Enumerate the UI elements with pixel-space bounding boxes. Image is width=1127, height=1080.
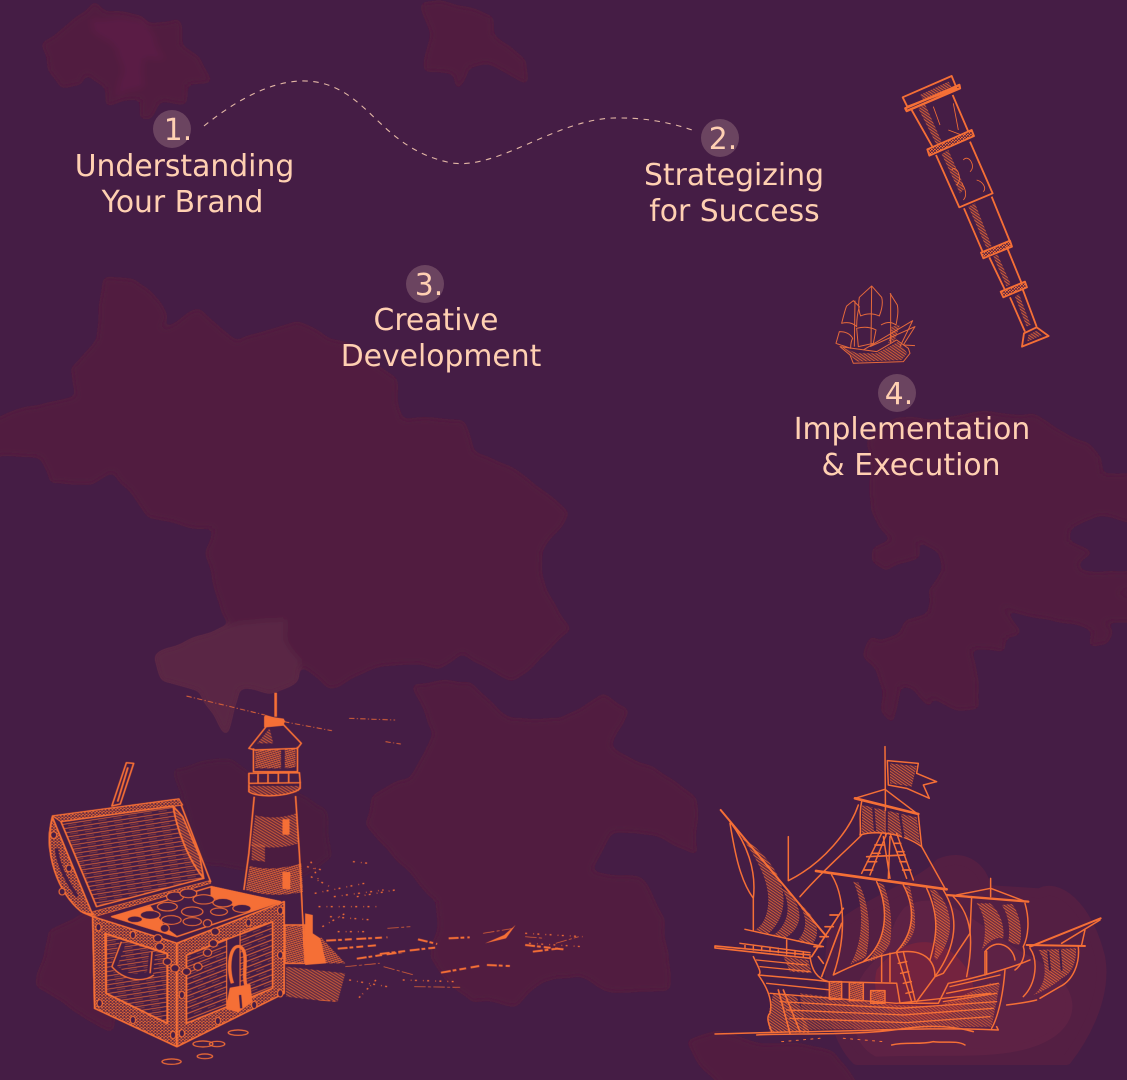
icon: spyglass <box>903 76 1049 347</box>
chest right face <box>177 902 284 1047</box>
mast bases <box>882 952 987 1002</box>
loose coins <box>162 1030 248 1064</box>
blob: top middle <box>423 0 527 90</box>
lateen cloth <box>730 822 823 947</box>
blob: top left <box>41 2 211 118</box>
necklace beads <box>154 920 219 975</box>
badge 1 <box>153 110 191 148</box>
blob: right <box>865 412 1127 725</box>
coins <box>127 889 251 926</box>
step 4 <box>794 374 1030 483</box>
cannon ports <box>829 982 885 1003</box>
roof <box>249 723 301 750</box>
icon: small ship <box>836 286 915 363</box>
blob: bottom left of ship <box>688 1032 860 1080</box>
main sail <box>832 875 972 1002</box>
spyglass: ring 2 <box>981 241 1012 258</box>
label 4: Implementation <box>794 412 1030 447</box>
main yard <box>816 871 947 889</box>
rigging <box>788 805 945 897</box>
main sail outline <box>832 875 954 1002</box>
tower walls <box>244 796 305 963</box>
route: dashed connector 1 to 2 <box>204 81 692 164</box>
rear stays and yard <box>957 878 1023 901</box>
ladders <box>862 833 913 880</box>
label 1: Understanding <box>75 149 294 184</box>
spyglass: ring 1 <box>927 130 974 156</box>
light beams <box>186 696 401 744</box>
hull hatch <box>768 993 810 1033</box>
right panel <box>186 922 273 1023</box>
gallery <box>249 773 300 783</box>
lid handle <box>112 763 134 806</box>
coin pile <box>167 892 183 901</box>
padlock <box>227 985 252 1012</box>
top sail <box>855 789 922 847</box>
label 1: Your Brand <box>101 185 263 220</box>
label 2: Strategizing <box>644 158 824 193</box>
gallery base <box>249 782 300 796</box>
tower base <box>285 925 305 963</box>
badge 2 <box>701 119 739 157</box>
step 2 <box>644 119 824 229</box>
small ship: masts and foresail <box>854 287 915 350</box>
hull <box>715 940 1030 1033</box>
waterline <box>715 1026 998 1045</box>
finial <box>265 693 285 722</box>
badge 3 <box>406 265 444 303</box>
blob: left of chest <box>40 900 115 1030</box>
hull outline <box>753 957 1030 1003</box>
spyglass: first tube <box>912 95 968 148</box>
spyglass: third tube <box>964 197 1010 253</box>
bowsprit and fore sail <box>1007 918 1101 1005</box>
chest left face <box>93 917 177 1047</box>
treasure chest <box>50 763 284 1064</box>
label 3: Development <box>341 339 541 374</box>
spyglass: fourth tube <box>989 247 1022 290</box>
blob: centre lower <box>368 682 697 1003</box>
fore yard <box>1027 942 1085 949</box>
top yard and stays <box>855 789 918 814</box>
lid side strap <box>50 817 93 915</box>
number 3: 3. <box>415 268 443 303</box>
lighthouse <box>186 693 401 965</box>
spyglass: eyepiece cap <box>903 76 957 107</box>
ship glow <box>830 860 1101 1060</box>
water lines <box>715 1027 998 1034</box>
beads <box>160 924 169 932</box>
number 1: 1. <box>164 113 192 148</box>
crest highlight <box>485 925 516 943</box>
spray dots <box>307 862 583 1000</box>
small ship: hull <box>840 340 910 363</box>
lid exterior <box>50 799 211 917</box>
glow: outer <box>830 860 1101 1060</box>
shore hatching <box>286 967 345 1002</box>
left handle <box>114 943 152 977</box>
spyglass: objective end <box>1022 327 1049 347</box>
lid rim <box>53 799 183 822</box>
rivets <box>51 832 283 1039</box>
hull planks <box>757 960 1000 1023</box>
spar <box>721 810 827 937</box>
flag <box>887 761 937 798</box>
top sail cloth <box>860 802 922 847</box>
blob: behind lighthouse <box>175 760 330 880</box>
number 4: 4. <box>885 377 913 412</box>
rope ladders at main mast <box>862 833 913 880</box>
badge 4 <box>878 374 916 412</box>
coin outlines <box>228 1030 248 1035</box>
label 4: & Execution <box>822 448 1000 483</box>
lantern room <box>253 747 297 772</box>
spar <box>1030 918 1101 947</box>
number 2: 2. <box>709 122 737 157</box>
chest opening <box>112 887 280 937</box>
left panel <box>105 933 167 1023</box>
illustration: lighthouse, chest and shore <box>50 693 583 1064</box>
wave streaks: fine <box>319 927 579 1002</box>
small ship: sails <box>836 286 898 348</box>
blob: centre large <box>0 278 568 684</box>
main sail folds hatching <box>850 882 869 965</box>
stern deck <box>715 946 810 958</box>
illustration: large ship <box>715 747 1101 1045</box>
windows <box>283 820 289 888</box>
spyglass: second tube <box>936 142 993 207</box>
fore ladder <box>812 908 843 977</box>
label 3: Creative <box>374 303 498 338</box>
top mast <box>883 747 888 837</box>
spyglass: ring 3 <box>1001 282 1027 297</box>
step 1 <box>75 110 294 220</box>
fore sail cloth <box>1007 947 1079 1005</box>
sea and shore spray <box>286 862 583 1002</box>
step 3 <box>341 265 541 374</box>
blob: top left core <box>95 20 168 97</box>
glow: middle <box>855 904 1069 1053</box>
rivet circles <box>96 924 101 931</box>
tower bands <box>251 813 299 847</box>
blob: lighter behind lighthouse <box>158 622 298 732</box>
flag and top mast <box>885 747 937 837</box>
label 2: for Success <box>649 194 820 229</box>
rear sail <box>947 878 1028 977</box>
spyglass: fifth tube <box>1010 288 1037 332</box>
opening bright strips <box>112 887 280 937</box>
lid curved shading <box>173 806 204 878</box>
lateen sail at stern <box>721 810 827 947</box>
lid interior wood <box>61 806 204 907</box>
wave streaks: bright <box>326 937 563 973</box>
glow: core <box>875 942 973 1020</box>
rear sail cloth <box>953 897 1028 977</box>
lower sail arc <box>935 897 972 977</box>
